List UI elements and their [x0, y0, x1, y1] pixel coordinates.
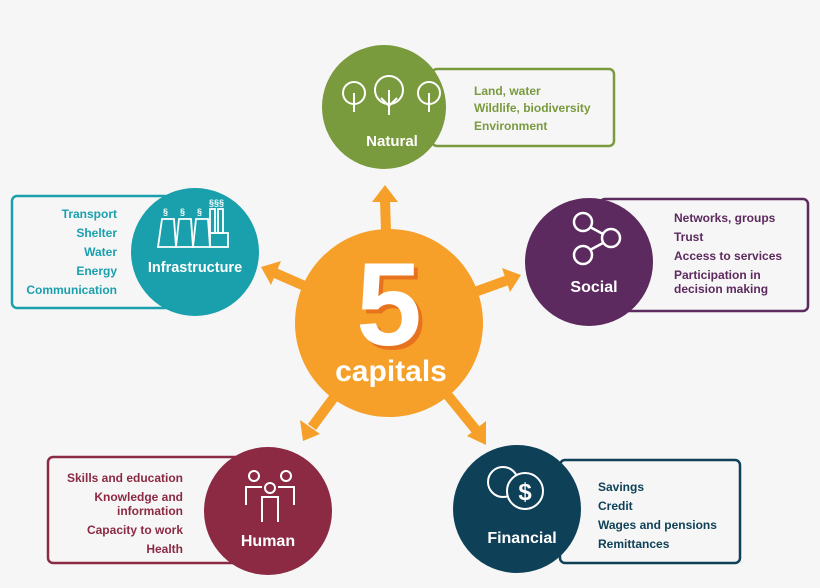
- panel: natural: Land, water: [474, 84, 541, 98]
- panel: human: Knowledge and: [94, 490, 183, 504]
- panel: human: Human: [241, 533, 295, 550]
- panel: social: Networks, groups: [674, 211, 776, 225]
- panel: natural: Environment: [474, 119, 547, 133]
- panel: financial: Remittances: [598, 537, 670, 551]
- panel: natural: [322, 45, 614, 169]
- centre circle: 5 capitals: [295, 229, 483, 417]
- panel: social: Trust: [674, 230, 703, 244]
- panel: natural: Wildlife, biodiversity: [474, 101, 591, 115]
- centre circle: 5 capitals: capitals: [335, 355, 447, 388]
- centre circle: 5 capitals: 5: [356, 239, 422, 371]
- panel: human: information: [117, 504, 183, 518]
- panel: natural: Natural: [366, 133, 418, 150]
- icon: people: [246, 471, 294, 522]
- panel: social: Participation in: [674, 268, 761, 282]
- panel: infrastructure: Energy: [76, 264, 117, 278]
- panel: social: Access to services: [674, 249, 782, 263]
- panel: financial: [453, 445, 740, 573]
- icon: factory: §: [180, 207, 185, 217]
- icon: coins: $: [518, 479, 532, 506]
- panel: social: Social: [570, 279, 618, 296]
- icon: trees: [343, 76, 440, 115]
- panel: infrastructure: Shelter: [76, 226, 117, 240]
- icon: factory: §: [197, 207, 202, 217]
- panel: human: Health: [146, 542, 183, 556]
- panel: financial: Wages and pensions: [598, 518, 717, 532]
- panel: infrastructure: Infrastructure: [148, 260, 242, 276]
- panel: financial: Credit: [598, 499, 633, 513]
- panel: infrastructure: Transport: [62, 207, 117, 221]
- panel: social: [525, 198, 808, 326]
- panel: social: decision making: [674, 282, 768, 296]
- icon: factory: §§§: [209, 198, 224, 208]
- panel: human: [48, 447, 332, 575]
- panel: infrastructure: Water: [84, 245, 117, 259]
- panel: human: Capacity to work: [87, 523, 183, 537]
- icon: coins: [488, 467, 543, 509]
- arrows from centre: [261, 185, 521, 445]
- panel: financial: Savings: [598, 480, 644, 494]
- centre circle: 5 capitals: 5: [360, 243, 426, 375]
- icon: factory: [158, 198, 228, 247]
- panel: infrastructure: [12, 188, 259, 316]
- panel: human: Skills and education: [67, 471, 183, 485]
- icon: share: [574, 213, 620, 264]
- panel: infrastructure: Communication: [26, 283, 117, 297]
- icon: factory: §: [163, 207, 168, 217]
- panel: financial: Financial: [487, 530, 557, 547]
